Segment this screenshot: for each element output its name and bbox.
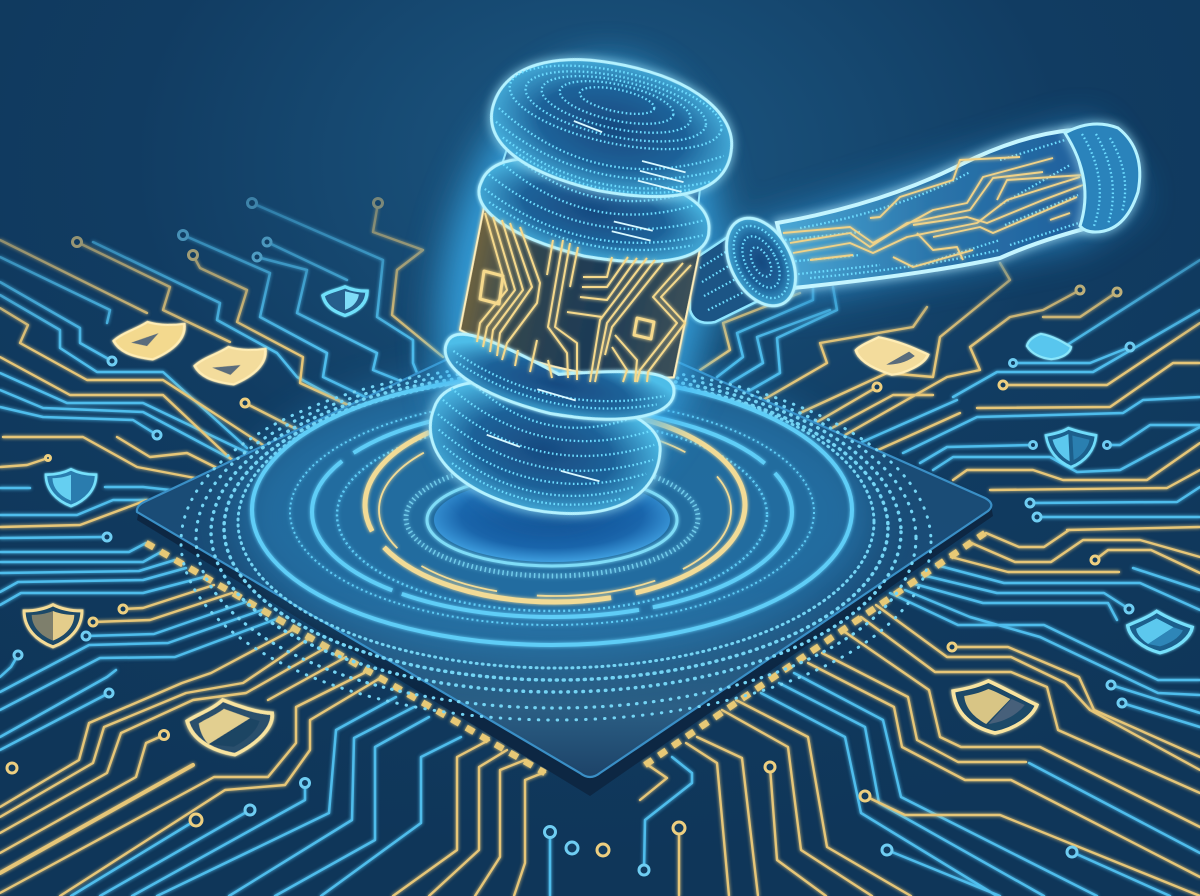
- handle shaft: [777, 130, 1095, 288]
- collar speckle: [722, 217, 800, 307]
- bottom ring speckle: [424, 380, 660, 523]
- blue rings: [252, 375, 852, 645]
- gavel head: [413, 40, 744, 535]
- neck speckle: [700, 240, 768, 310]
- upper ring speckle: [478, 152, 711, 268]
- circuit traces: blue: [0, 203, 1200, 896]
- concentric rings: [181, 364, 931, 720]
- gavel glow: [399, 37, 1140, 533]
- handle speckle: [785, 140, 1088, 278]
- circuit node dots: [14, 198, 1134, 875]
- shields: [24, 287, 1192, 761]
- chip: [137, 308, 993, 796]
- central well: [434, 478, 670, 562]
- cap speckle: [487, 48, 737, 212]
- shield: blue top left: [323, 287, 367, 315]
- gavel data marks: [482, 117, 691, 485]
- circuit board traces: [0, 198, 1200, 896]
- handle neck: [690, 232, 770, 323]
- handle end knob: [1065, 124, 1140, 232]
- shield: gold lower left: [24, 605, 82, 647]
- shield: gold upper right: [856, 337, 928, 375]
- shield: blue right: [1046, 428, 1096, 467]
- inner rings: [406, 460, 698, 576]
- dotted outer rings: [181, 364, 931, 720]
- gold node dots: [7, 198, 1121, 856]
- neck: [500, 133, 706, 214]
- lower band: [437, 331, 677, 438]
- chip body side: [137, 320, 993, 796]
- shield: blue left: [46, 469, 96, 506]
- bottom ring: [417, 366, 669, 533]
- shield: blue upper right: [1027, 334, 1071, 359]
- circuit traces: gold: [0, 203, 1200, 896]
- shield: gold bottom left: [185, 693, 277, 761]
- upper ring: [470, 144, 718, 280]
- barrel circuit traces: [477, 213, 691, 382]
- gold arc ring: [365, 408, 745, 602]
- shield: gold left 1: [112, 317, 188, 364]
- chip pins: [146, 533, 985, 773]
- chip body top: [137, 308, 991, 777]
- handle collar: [712, 206, 810, 318]
- shield: gold bottom right: [953, 681, 1037, 733]
- lower band speckle: [447, 351, 665, 425]
- shield: gold left 2: [193, 342, 269, 389]
- chip glow: [235, 365, 875, 665]
- cap: [480, 40, 744, 216]
- handle circuit traces: [783, 157, 1083, 267]
- knob speckle: [1082, 134, 1125, 226]
- gold barrel: [455, 204, 701, 392]
- shield: blue lower right: [1128, 611, 1192, 653]
- gavel handle: [690, 124, 1140, 323]
